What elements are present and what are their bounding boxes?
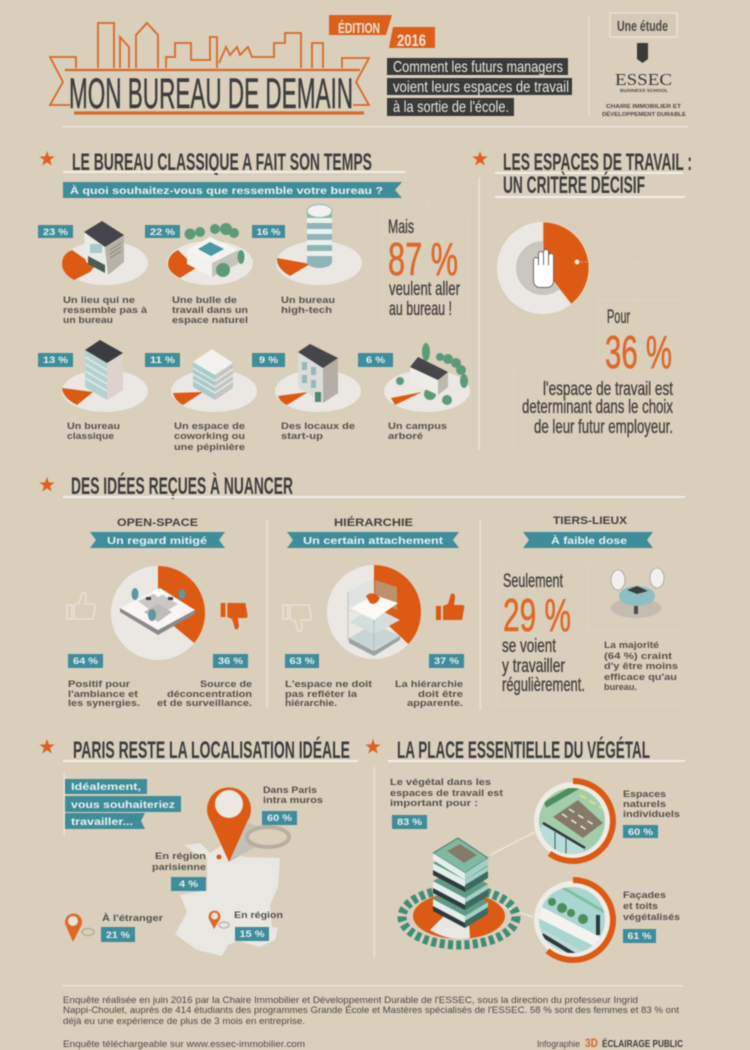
icon: big pin [207, 787, 289, 862]
logo: ESSEC: Une étude [617, 18, 668, 35]
text: majorité [604, 640, 678, 693]
credit: ÉCLAIRAGE PUBLIC [602, 1037, 683, 1050]
subtitle: voient leurs espaces de travail [393, 79, 569, 96]
logo: skyline banner [50, 23, 369, 113]
illustration: open-space floor [120, 588, 195, 635]
circle: façades [530, 880, 613, 965]
methodology text [63, 995, 679, 1027]
logo: ESSEC: BUSINESS SCHOOL [620, 88, 668, 93]
tag: 37 %: 37 % [434, 656, 459, 666]
icon: pin abroad [65, 914, 94, 942]
logo: ESSEC: CHAIRE IMMOBILIER ET [606, 104, 682, 110]
pie: 13 % [38, 340, 148, 442]
caption: against: L'espace ne doit [285, 679, 373, 690]
label: région [234, 910, 283, 941]
pie: 6 %: Un campus [388, 421, 447, 432]
sub-panel: hiérarchie [283, 516, 464, 709]
caption: negative: déconcentration [167, 689, 252, 700]
callout: 36 %: 36 % [605, 326, 672, 378]
text: majorité: La majorité [604, 640, 659, 651]
question banner: À quoi souhaitez-vous que ressemble votre bureau ? [70, 184, 383, 197]
pie: 23 %: ressemble pas à [63, 305, 148, 316]
icon: thumb down orange [221, 603, 248, 630]
teal question: Idéalement, [71, 782, 141, 793]
callout: 87 %: veulent aller [389, 279, 460, 300]
teal question [65, 779, 181, 829]
label: façades: 61 % [628, 931, 652, 941]
pie: 23 % [38, 221, 148, 326]
banner: À faible dose [551, 534, 628, 547]
sub-panel: tiers-lieux: TIERS-LIEUX [553, 515, 628, 527]
panel: idées reçues [39, 472, 685, 710]
pie: 16 % [252, 204, 362, 316]
heading: DES IDÉES REÇUES À NUANCER [71, 472, 293, 500]
caption: positive: Positif pour [68, 679, 130, 690]
text: majorité: (64 %) craint [604, 651, 673, 662]
label: région parisienne: parisienne [152, 862, 206, 873]
icon: star [472, 151, 488, 166]
caption: negative: Source de [200, 679, 252, 690]
donut chart: open-space [111, 566, 205, 660]
credit: Infographie [537, 1039, 580, 1050]
pie: 22 %: 22 % [150, 227, 175, 237]
panel: le bureau classique [38, 149, 470, 453]
pie: 13 %: Un bureau [67, 421, 120, 432]
icon: café table [611, 568, 664, 618]
callout: 29 %: se voient [502, 636, 557, 657]
caption: against: pas refléter la [285, 689, 358, 700]
label: Paris: 60 % [267, 813, 292, 823]
text: intro: espaces de travail est [390, 788, 504, 799]
label: espaces naturels: individuels [623, 809, 680, 820]
text: majorité: efficace qu'au [604, 672, 677, 683]
label: Paris: intra muros [263, 795, 323, 806]
callout: 36 % [513, 300, 683, 450]
text: majorité: bureau. [604, 682, 637, 693]
label: région parisienne: En région [155, 851, 206, 862]
tag: 64 %: 64 % [73, 656, 98, 666]
main title: MON BUREAU DE DEMAIN [69, 70, 353, 118]
callout: 87 %: Mais [388, 217, 414, 238]
callout: 36 %: l'espace de travail est [543, 379, 674, 400]
label: région parisienne: 4 % [179, 879, 198, 889]
pie: 11 %: 11 % [150, 355, 175, 365]
caption: for: La hiérarchie [395, 679, 463, 690]
sub-panel: tiers-lieux [497, 515, 683, 705]
tag: 64 % [68, 654, 103, 668]
caption: for: doit être [418, 689, 463, 700]
heading: UN CRITÈRE DÉCISIF [503, 171, 645, 199]
callout: 87 %: 87 % [388, 233, 458, 285]
heading: LE BUREAU CLASSIQUE A FAIT SON TEMPS [72, 149, 372, 176]
sub-panel: open-space [67, 517, 252, 709]
pie: 13 %: 13 % [43, 355, 68, 365]
illustration: building floors [348, 578, 400, 656]
label: région: En région [234, 910, 283, 921]
tag: 37 % [429, 654, 464, 668]
callout: 36 %: de leur futur employeur. [534, 417, 673, 438]
label: étranger: À l'étranger [102, 913, 163, 924]
pie: 11 %: une pépinière [174, 442, 245, 453]
sub-panel: open-space: OPEN-SPACE [117, 517, 198, 529]
pie: 22 %: travail dans un [172, 305, 248, 316]
footer [62, 985, 683, 1050]
pie: 9 %: Des locaux de [281, 421, 355, 432]
heading: PARIS RESTE LA LOCALISATION IDÉALE [73, 736, 350, 764]
label: façades [623, 890, 680, 943]
pie: 22 % [145, 223, 253, 326]
icon: star [365, 739, 381, 754]
pie: 13 %: classique [67, 431, 114, 442]
text: intro: important pour : [390, 798, 478, 809]
pie: 16 %: 16 % [256, 227, 280, 237]
pie: 23 %: Un lieu qui ne [63, 295, 135, 306]
label: Paris [262, 785, 323, 825]
icon: thumb down outline [283, 605, 311, 632]
heading [495, 149, 692, 199]
circle: espaces naturels [530, 781, 613, 870]
tag: 36 % [213, 654, 248, 668]
download link: Enquête téléchargeable sur www.essec-immobilier.com [63, 1039, 305, 1050]
pie: 22 %: Une bulle de [172, 295, 237, 306]
banner [287, 532, 459, 548]
label: étranger [101, 913, 163, 942]
pie: 23 %: 23 % [43, 227, 68, 237]
callout: 87 % [382, 208, 468, 325]
pie: 6 %: arboré [388, 431, 423, 442]
caption: positive: l'ambiance et [68, 689, 139, 700]
donut chart: 36 % [497, 222, 589, 314]
tag: 36 %: 36 % [218, 656, 243, 666]
pie: 9 % [252, 344, 361, 442]
header [50, 13, 688, 128]
logo: ESSEC: ESSEC [615, 70, 672, 89]
label: région: 15 % [240, 929, 264, 939]
panel: paris [39, 736, 358, 956]
methodology text: Enquête réalisée en juin 2016 par la Chaire Immobilier et Développement Durable de l'ESSEC, sous la direction du professeur Ingrid [63, 995, 638, 1006]
text: majorité: d'y être moins [604, 661, 678, 672]
pie: 11 % [145, 349, 257, 453]
teal question: travailler... [71, 817, 133, 828]
caption: negative: et de surveillance. [157, 698, 252, 709]
text: intro [390, 777, 504, 829]
edition tag: ÉDITION [338, 20, 380, 37]
icon: thumb up outline [67, 592, 95, 619]
label: région parisienne [152, 851, 206, 891]
logo: ESSEC [602, 13, 686, 118]
banner: Un regard mitigé [107, 536, 208, 547]
label: espaces naturels: Espaces [623, 789, 666, 800]
tag: 63 % [285, 654, 319, 668]
logo: ESSEC: DÉVELOPPEMENT DURABLE [602, 110, 686, 118]
caption: positive [68, 679, 140, 709]
icon: star [39, 477, 55, 492]
label: espaces naturels: 60 % [628, 827, 653, 837]
pie: 23 %: un bureau [63, 315, 113, 326]
label: façades: végétalisés [623, 912, 680, 923]
pie: 11 %: Un espace de [174, 421, 245, 432]
pie: 6 %: 6 % [366, 355, 385, 365]
subtitle [387, 58, 572, 116]
pie: 22 %: espace naturel [172, 315, 248, 326]
subtitle: à la sortie de l'école. [393, 99, 509, 116]
caption: against: hiérarchie. [285, 698, 337, 709]
pie: 9 %: 9 % [259, 355, 278, 365]
label: façades: Façades [623, 890, 666, 901]
callout: 29 %: régulièrement. [502, 675, 585, 696]
methodology text: déjà eu une expérience de plus de 3 mois en entreprise. [63, 1016, 305, 1027]
text: intro: Le végétal dans les [390, 777, 491, 788]
credit: 3D [585, 1036, 598, 1050]
callout: 29 %: y travailler [502, 656, 565, 677]
icon: star [39, 151, 55, 166]
teal question: vous souhaiteriez [71, 800, 175, 811]
callout: 29 % [497, 563, 683, 705]
callout: 29 %: 29 % [503, 589, 571, 641]
icon: thumb up orange [436, 594, 464, 620]
pie: 16 %: high-tech [281, 305, 332, 316]
sub-panel: hiérarchie: HIÉRARCHIE [334, 516, 413, 529]
methodology text: Nappi-Choulet, auprès de 414 étudiants des programmes Grande École et Mastères spécialisés de l'ESSEC. 58 % sont des femmes et 83 % ont [63, 1005, 679, 1016]
caption: negative [157, 679, 252, 709]
illustration: green building [402, 838, 516, 945]
map: France [175, 840, 280, 956]
text: intro: 83 % [397, 817, 422, 827]
icon: star [39, 739, 55, 754]
pie: 16 %: Un bureau [281, 295, 335, 306]
callout: 87 %: au bureau ! [389, 299, 452, 320]
label: étranger: 21 % [106, 930, 130, 940]
banner [523, 532, 653, 548]
label: espaces naturels [623, 789, 680, 838]
panel: végétal [365, 736, 685, 965]
label: espaces naturels: naturels [623, 799, 666, 810]
banner [90, 532, 225, 548]
callout: 29 %: Seulement [503, 571, 563, 592]
edition tag [329, 15, 435, 50]
banner: Un certain attachement [303, 536, 444, 547]
caption: for: apparente. [407, 698, 463, 709]
pie: 11 %: coworking ou [174, 431, 245, 442]
caption: positive: les synergies. [68, 698, 140, 709]
callout: 36 %: Pour [607, 307, 630, 328]
subtitle: Comment les futurs managers [393, 59, 563, 76]
pie: 9 %: start-up [281, 431, 323, 442]
panel: espaces de travail [472, 149, 692, 450]
donut chart: hiérarchie [327, 565, 421, 659]
icon: hand [533, 249, 554, 288]
icon: pin region [208, 911, 229, 929]
callout: 36 %: determinant dans le choix [522, 397, 673, 418]
caption: against [285, 679, 373, 709]
label: Paris: Dans Paris [263, 785, 317, 796]
pie: 6 % [358, 343, 470, 442]
caption: for [395, 679, 463, 709]
label: façades: et toits [623, 901, 658, 912]
question banner [63, 182, 402, 198]
tag: 63 %: 63 % [290, 656, 314, 666]
edition tag: 2016 [397, 31, 426, 50]
credit [537, 1036, 683, 1050]
